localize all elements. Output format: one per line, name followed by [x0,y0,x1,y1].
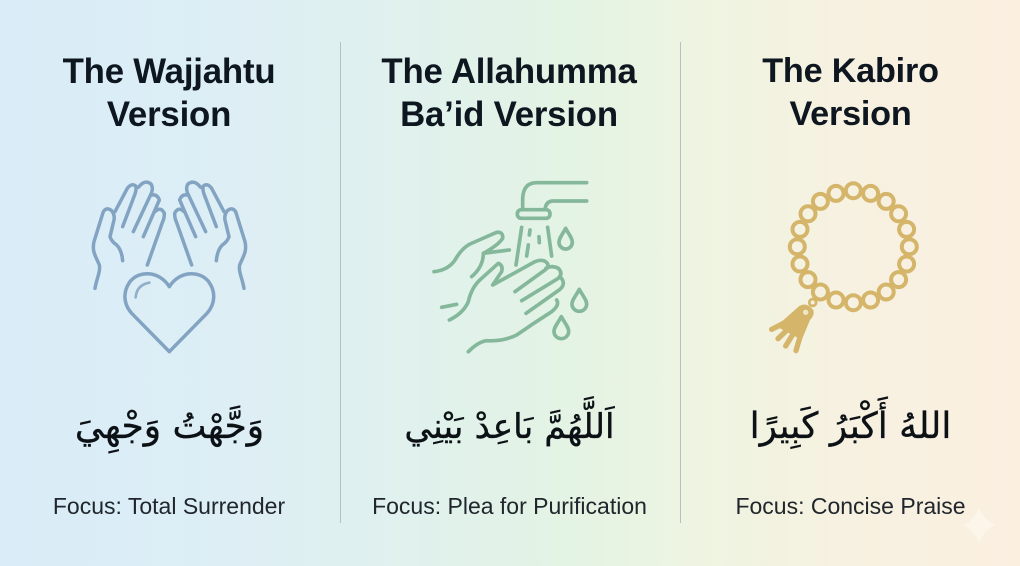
icon: prayer beads with tassel [769,181,919,354]
icon: faint sparkle watermark [964,509,994,541]
panel: The Kabiro Version [735,52,966,519]
heading: The Allahumma Ba'id Version: The Allahumma [381,52,637,91]
heading: The Kabiro Version: The Kabiro [762,52,939,90]
heading: The Kabiro Version [762,52,939,133]
heading: The Allahumma Ba'id Version [381,52,638,134]
heading: The Kabiro Version: Version [789,95,912,133]
Arabic phrase: Allahu akbar kabira: اللهُ أَكْبَرُ كَبِيرًا [750,406,951,447]
heading: The Wajjahtu Version: The Wajjahtu [63,52,275,91]
heading: The Wajjahtu Version: Version [107,95,231,134]
heading: The Wajjahtu Version [63,52,275,134]
panel: The Wajjahtu Version [53,52,285,519]
caption: Focus: Total Surrender: Focus: Total Surrender [53,493,285,519]
icon: hands washing under a faucet [432,180,588,354]
divider: left [340,42,341,523]
caption: Focus: Concise Praise: Focus: Concise Praise [735,493,966,519]
Arabic phrase: allahumma ba'id bayni: اَللَّهُمَّ بَاعِدْ بَيْنِي [404,407,615,447]
divider: right [680,42,681,523]
icon: raised hands above a heart [92,180,248,354]
panel: The Allahumma Ba'id Version [372,52,647,519]
Arabic phrase: wajjahtu wajhiya: وَجَّهْتُ وَجْهِيَ [75,406,264,447]
heading: The Allahumma Ba'id Version: Ba’id Version [400,95,618,134]
caption: Focus: Plea for Purification: Focus: Plea for Purification [372,493,647,519]
